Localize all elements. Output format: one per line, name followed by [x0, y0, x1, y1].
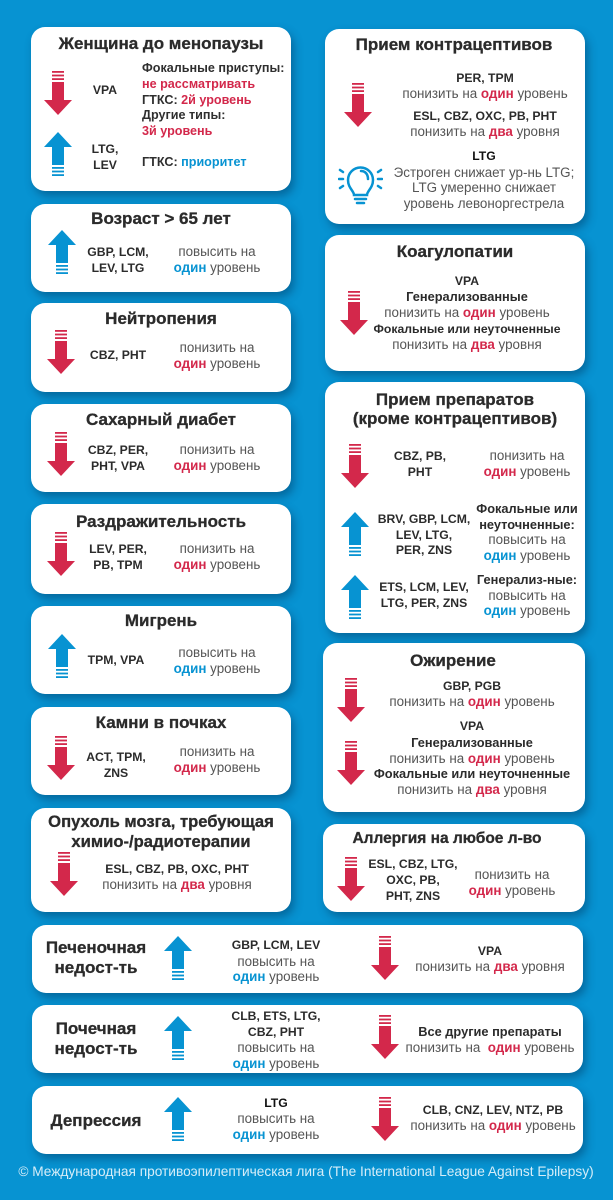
panel: liver failure: [32, 925, 583, 993]
text: lower one level: понизить на: [475, 867, 549, 882]
drugs: [89, 542, 147, 572]
drugs: [87, 245, 149, 275]
text: LTG note: [394, 149, 574, 211]
drugs: [88, 443, 148, 473]
icon: red down arrow: [371, 936, 399, 980]
text: VPA recommendations: [374, 718, 570, 798]
text: VPA lower two levels: [415, 943, 565, 975]
icon: red down arrow: [44, 71, 72, 115]
text: focal raise one level: Фокальные или: [476, 501, 578, 516]
text: ESL group: [410, 109, 560, 139]
panel: premenopausal woman: [31, 27, 291, 191]
icon: red down arrow: [47, 330, 75, 374]
drugs: [368, 856, 458, 904]
drugs: TPM, VPA: [88, 653, 144, 667]
text: raise group: CBZ, PHT: [248, 1025, 304, 1039]
text: VPA recommendations: Фокальные или неуточненные: [374, 766, 570, 781]
icon: red down arrow: [344, 83, 372, 127]
icon: red down arrow: [340, 291, 368, 335]
heading: age over 65: Возраст > 65 лет: [91, 209, 231, 228]
heading: coagulopathy: Коагулопатии: [397, 242, 513, 261]
text: VPA recommendations: VPA: [460, 719, 484, 733]
icon: red down arrow: [337, 678, 365, 722]
text: lower one level: [174, 744, 260, 775]
heading: liver failure: недост-ть: [55, 958, 137, 977]
text: lower one level: понизить на: [180, 442, 254, 457]
panel: kidney stones: [31, 707, 291, 795]
text: raise group: [231, 1008, 321, 1072]
heading: renal failure: [55, 1019, 137, 1059]
heading: kidney stones: Камни в почках: [96, 713, 226, 732]
text: raise group: повысить на: [237, 1040, 315, 1055]
panel: depression: [32, 1086, 583, 1154]
drugs: PB, TPM: [93, 558, 143, 572]
panel: renal failure: [32, 1005, 583, 1073]
icon: red down arrow: [371, 1097, 399, 1141]
heading: concomitant drugs: (кроме контрацептивов): [353, 409, 557, 428]
text: generalized raise one level: Генерализ-ные:: [477, 572, 577, 587]
icon: red down arrow: [371, 1015, 399, 1059]
text: lower one level group: CLB, CNZ, LEV, NTZ, PB: [423, 1103, 563, 1117]
text: seizure type recommendations: Другие типы:: [142, 108, 225, 122]
text: drugs and lower two levels: [102, 862, 252, 892]
drugs: OXC, PB,: [386, 873, 440, 887]
heading: drug allergy: Аллергия на любое л-во: [352, 830, 542, 847]
icon: red down arrow: [337, 857, 365, 901]
drugs: lower group: [394, 449, 446, 479]
heading: irritability: Раздражительность: [76, 512, 246, 531]
text: lower one level: понизить на: [180, 541, 254, 556]
icon: light bulb: [338, 166, 383, 204]
text: lower one level: один уровень: [174, 557, 260, 572]
text: lower one level: [484, 448, 570, 479]
text: VPA recommendations: понизить на один уровень: [384, 305, 550, 320]
text: lower one level group: [410, 1102, 576, 1134]
text: VPA recommendations: Генерализованные: [411, 735, 533, 750]
text: lower one level: один уровень: [174, 458, 260, 473]
drugs: CBZ, PER,: [88, 443, 148, 457]
text: lower one level: один уровень: [174, 356, 260, 371]
text: PER, TPM: понизить на один уровень: [402, 86, 568, 101]
text: seizure type recommendations: [142, 61, 284, 138]
icon: red down arrow: [337, 741, 365, 785]
text: VPA recommendations: Фокальные или неуточненные: [374, 322, 560, 336]
drugs: LTG, LEV: LTG,: [92, 142, 118, 156]
text: raise group: один уровень: [233, 1056, 319, 1071]
drugs: lower group: PHT: [408, 465, 432, 479]
panel: diabetes: [31, 404, 291, 492]
panel: obesity: [323, 643, 585, 812]
text: lower one level: один уровень: [174, 760, 260, 775]
panel: migraine: [31, 606, 291, 694]
text: VPA lower two levels: VPA: [478, 944, 502, 958]
drug: VPA: VPA: [93, 83, 117, 97]
panel: age over 65: [31, 204, 291, 292]
text: all other drugs: [405, 1024, 575, 1056]
icon: blue up arrow: [164, 936, 192, 980]
text: lower one level: [174, 541, 260, 572]
icon: red down arrow: [47, 736, 75, 780]
icon: red down arrow: [50, 852, 78, 896]
text: lower one level group: понизить на один уровень: [410, 1118, 576, 1133]
heading: contraceptives: Прием контрацептивов: [356, 35, 552, 54]
heading: liver failure: [46, 938, 146, 978]
panel: drug allergy: [323, 824, 585, 912]
panel: irritability: [31, 504, 291, 594]
text: LTG note: LTG: [472, 149, 496, 163]
icon: red down arrow: [341, 444, 369, 488]
drugs: focal raise group: BRV, GBP, LCM,: [378, 512, 470, 526]
text: raise group: один уровень: [233, 969, 319, 984]
text: LTG note: LTG умеренно снижает: [412, 180, 556, 195]
text: VPA lower two levels: понизить на два уровня: [415, 959, 565, 974]
icon: blue up arrow: [48, 634, 76, 678]
icon: red down arrow: [47, 532, 75, 576]
heading: depression: Депрессия: [51, 1111, 141, 1130]
text: raise one level: один уровень: [174, 661, 260, 676]
text: seizure type recommendations: 3й уровень: [142, 124, 212, 138]
heading: brain tumor: Опухоль мозга, требующая: [48, 812, 274, 831]
text: lower one level: один уровень: [484, 464, 570, 479]
heading: brain tumor: химио-/радиотерапии: [71, 832, 251, 851]
text: generalized raise one level: повысить на: [488, 588, 566, 603]
text: lower one level: понизить на: [180, 340, 254, 355]
heading: liver failure: Печеночная: [46, 938, 146, 957]
text: VPA recommendations: понизить на один уровень: [389, 751, 555, 766]
heading: brain tumor: [48, 812, 274, 851]
text: ESL group: ESL, CBZ, OXC, PB, PHT: [413, 109, 557, 123]
text: VPA recommendations: [374, 274, 560, 352]
drugs: PHT, VPA: [91, 459, 145, 473]
drugs: ZNS: [104, 766, 128, 780]
text: LTG raise one level: [233, 1095, 319, 1143]
heading: renal failure: Почечная: [56, 1019, 136, 1038]
text: focal raise one level: неуточненные:: [479, 517, 575, 532]
drugs: LTG, LEV: LEV: [93, 158, 117, 172]
heading: renal failure: недост-ть: [55, 1039, 137, 1058]
text: VPA recommendations: понизить на два уровня: [392, 337, 542, 352]
footer: copyright: © Международная противоэпилептическая лига (The International League Against Epilepsy): [18, 1164, 594, 1179]
text: GBP, PGB: GBP, PGB: [443, 679, 501, 693]
text: raise one level: повысить на: [178, 244, 256, 259]
text: generalized raise one level: [477, 572, 577, 619]
text: raise one level: повысить на: [178, 645, 256, 660]
drugs: generalized raise group: [379, 580, 469, 610]
drugs: focal raise group: [378, 512, 470, 557]
icon: red down arrow: [47, 432, 75, 476]
drugs: generalized raise group: LTG, PER, ZNS: [381, 596, 467, 610]
drugs: focal raise group: LEV, LTG,: [396, 528, 452, 542]
drugs: PHT, ZNS: [386, 889, 440, 903]
heading: migraine: Мигрень: [125, 611, 197, 630]
panel: neutropenia: [31, 303, 291, 392]
text: lower one level: понизить на: [180, 744, 254, 759]
text: lower one level: [174, 442, 260, 473]
drugs: ACT, TPM,: [86, 750, 146, 764]
text: lower one level: [174, 340, 260, 371]
text: VPA recommendations: VPA: [455, 274, 479, 288]
drugs: lower group: CBZ, PB,: [394, 449, 446, 463]
panel: concomitant drugs: [325, 382, 585, 633]
text: raise one level: один уровень: [174, 260, 260, 275]
text: focal raise one level: повысить на: [488, 532, 566, 547]
text: raise group: CLB, ETS, LTG,: [231, 1009, 321, 1023]
text: priority: ГТКС: приоритет: [142, 155, 246, 169]
panel: contraceptives: [325, 29, 585, 224]
icon: blue up arrow: [44, 132, 72, 176]
icon: blue up arrow: [48, 230, 76, 274]
text: all other drugs: Все другие препараты: [418, 1024, 562, 1039]
text: LTG raise one level: один уровень: [233, 1127, 319, 1142]
text: drugs and lower two levels: ESL, CBZ, PB, OXC, PHT: [105, 862, 249, 876]
text: generalized raise one level: один уровень: [484, 603, 570, 618]
text: drugs and lower two levels: понизить на два уровня: [102, 877, 252, 892]
text: PER, TPM: [402, 71, 568, 101]
text: GBP, PGB: понизить на один уровень: [389, 694, 555, 709]
text: LTG note: Эстроген снижает ур-нь LTG;: [394, 165, 574, 180]
text: VPA recommendations: Генерализованные: [406, 289, 528, 304]
text: raise group: [232, 937, 320, 985]
icon: blue up arrow: [164, 1016, 192, 1060]
text: lower one level: один уровень: [469, 883, 555, 898]
heading: premenopausal woman: Женщина до менопаузы: [59, 34, 263, 53]
drugs: [86, 750, 146, 780]
text: raise group: повысить на: [237, 954, 315, 969]
text: raise group: GBP, LCM, LEV: [232, 938, 320, 952]
icon: blue up arrow: [164, 1097, 192, 1141]
panel: brain tumor: [31, 808, 291, 912]
text: seizure type recommendations: не рассматривать: [142, 77, 255, 91]
heading: concomitant drugs: Прием препаратов: [376, 390, 534, 409]
drugs: generalized raise group: ETS, LCM, LEV,: [379, 580, 469, 594]
text: lower one level: [469, 867, 555, 899]
icon: blue up arrow: [341, 575, 369, 619]
text: ESL group: понизить на два уровня: [410, 124, 560, 139]
text: LTG note: уровень левоноргестрела: [404, 196, 564, 211]
panel: coagulopathy: [325, 235, 585, 371]
drugs: CBZ, PHT: [90, 348, 146, 362]
text: seizure type recommendations: ГТКС: 2й уровень: [142, 93, 252, 107]
text: focal raise one level: [476, 501, 578, 563]
text: focal raise one level: один уровень: [484, 548, 570, 563]
text: GBP, PGB: [389, 678, 555, 710]
text: raise one level: [174, 645, 260, 676]
text: raise one level: [174, 244, 260, 275]
text: PER, TPM: PER, TPM: [456, 71, 514, 85]
heading: diabetes: Сахарный диабет: [86, 410, 236, 429]
heading: concomitant drugs: [353, 390, 557, 428]
text: LTG raise one level: LTG: [264, 1096, 288, 1110]
heading: neutropenia: Нейтропения: [105, 309, 217, 328]
heading: obesity: Ожирение: [410, 651, 496, 670]
text: lower one level: понизить на: [490, 448, 564, 463]
text: VPA recommendations: понизить на два уровня: [397, 782, 547, 797]
drugs: LEV, PER,: [89, 542, 147, 556]
text: seizure type recommendations: Фокальные приступы:: [142, 61, 284, 75]
text: LTG raise one level: повысить на: [237, 1111, 315, 1126]
drugs: focal raise group: PER, ZNS: [396, 543, 452, 557]
text: all other drugs: понизить на один уровень: [405, 1040, 575, 1055]
drugs: ESL, CBZ, LTG,: [368, 857, 458, 871]
drugs: GBP, LCM,: [87, 245, 149, 259]
drugs: LTG, LEV: [92, 142, 118, 172]
icon: blue up arrow: [341, 512, 369, 556]
drugs: LEV, LTG: [92, 261, 144, 275]
